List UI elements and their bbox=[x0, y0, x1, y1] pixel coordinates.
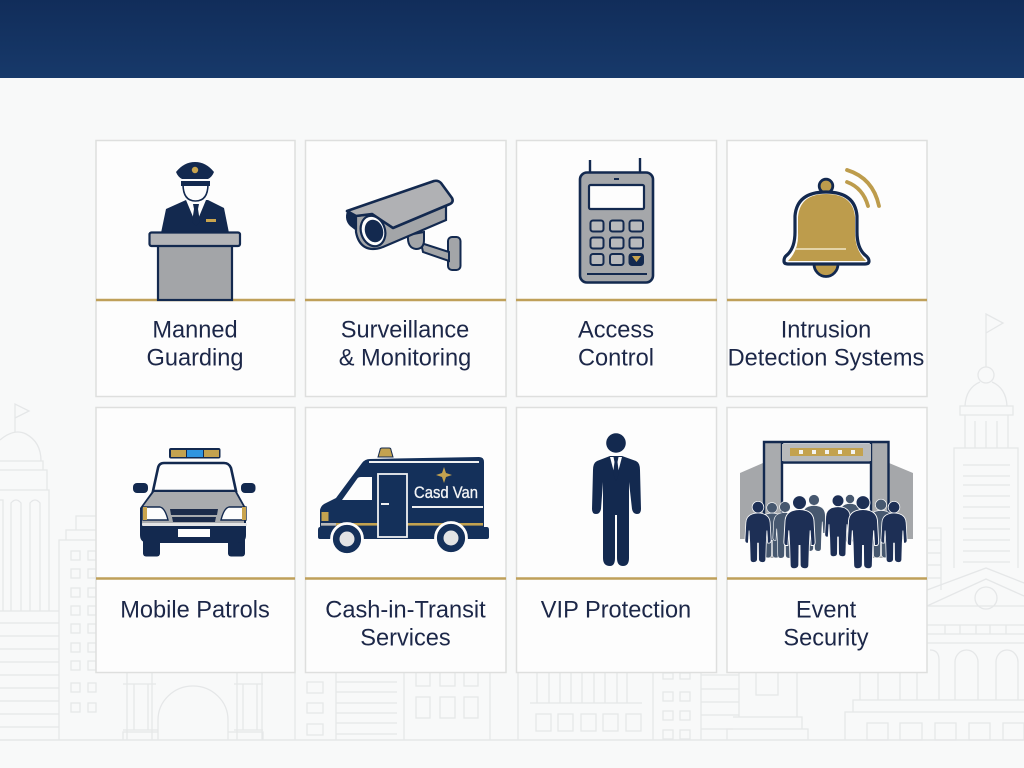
panel: Surveillance & Monitoring bbox=[305, 140, 506, 396]
header band bbox=[0, 0, 1024, 78]
label bbox=[339, 318, 471, 372]
label: Access bbox=[578, 318, 654, 344]
label: Control bbox=[578, 346, 654, 372]
label bbox=[728, 318, 924, 372]
label: Guarding bbox=[146, 346, 244, 372]
panel: Cash-in-Transit Services bbox=[305, 408, 506, 672]
label bbox=[325, 598, 486, 652]
icon: cash van: Casd Van bbox=[414, 483, 478, 502]
label bbox=[783, 598, 869, 652]
label: & Monitoring bbox=[339, 346, 471, 372]
label: Cash-in-Transit bbox=[325, 598, 486, 624]
background city skyline bbox=[0, 314, 1024, 740]
icon: cash van bbox=[318, 448, 489, 554]
panel: VIP Protection bbox=[516, 408, 717, 672]
panel: Manned Guarding bbox=[96, 140, 295, 396]
panel: Event Security bbox=[727, 408, 927, 672]
label: Mobile Patrols bbox=[120, 598, 270, 624]
panel: Intrusion Detection Systems bbox=[727, 140, 927, 396]
icon: patrol car bbox=[133, 448, 256, 556]
icon: access keypad bbox=[580, 158, 653, 282]
label: Intrusion bbox=[781, 318, 871, 344]
icon: CCTV camera bbox=[346, 181, 460, 270]
label: VIP Protection bbox=[541, 598, 691, 624]
icon: alarm bell bbox=[784, 170, 879, 276]
label: Surveillance bbox=[341, 318, 469, 344]
panel: Mobile Patrols bbox=[96, 408, 295, 672]
label: Detection Systems bbox=[728, 346, 924, 372]
icon: event gate with crowd bbox=[740, 442, 913, 569]
icon: guard at podium bbox=[150, 162, 240, 300]
label bbox=[146, 318, 244, 372]
label: Services bbox=[360, 626, 451, 652]
panel: Access Control bbox=[516, 140, 717, 396]
label: Manned bbox=[152, 318, 238, 344]
icon: suited VIP bbox=[592, 433, 641, 566]
label: Event bbox=[796, 598, 857, 624]
label: Security bbox=[783, 626, 869, 652]
label bbox=[578, 318, 654, 372]
